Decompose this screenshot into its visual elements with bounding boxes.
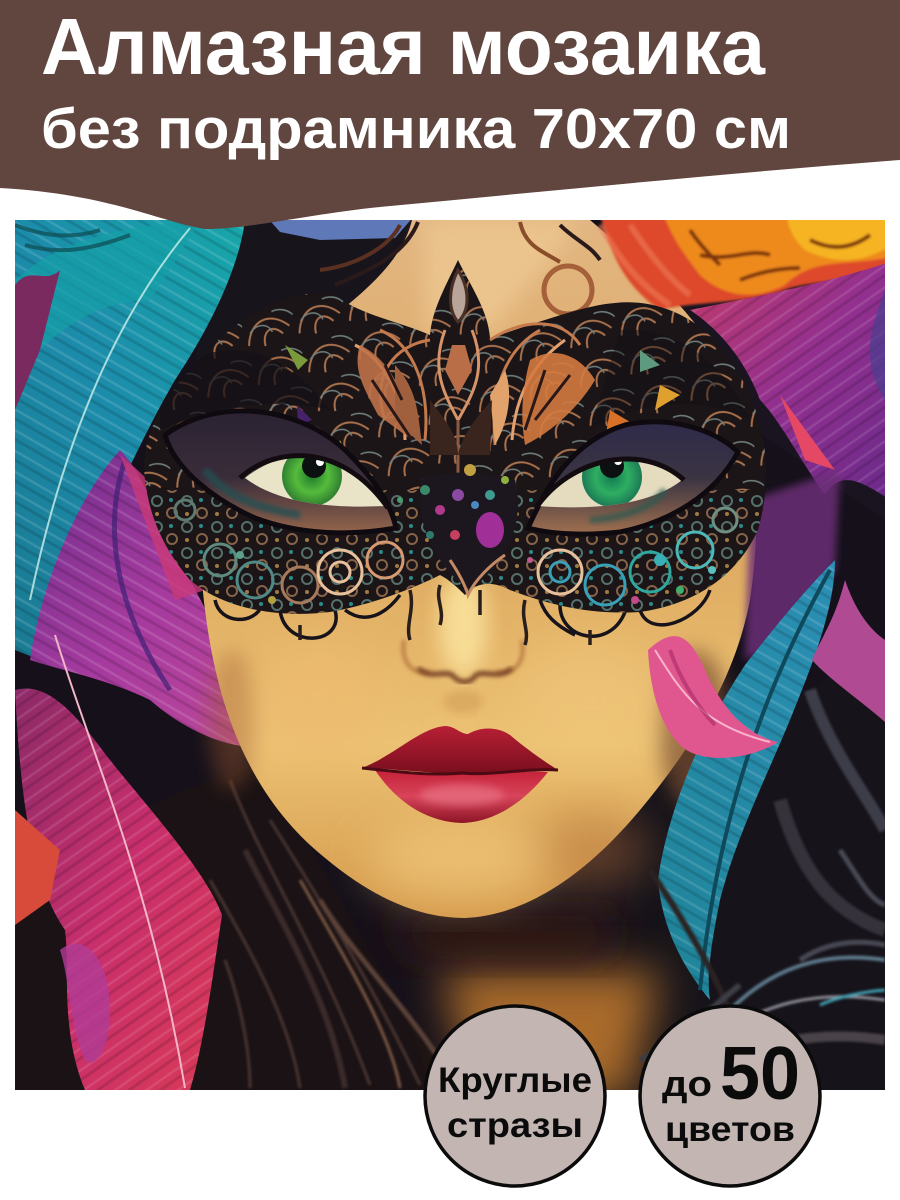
feather: lower-left pink <box>15 635 222 1090</box>
title <box>41 2 791 161</box>
badge: round rhinestones: Круглые <box>438 1061 592 1100</box>
copper fill patches <box>358 345 412 440</box>
badge: up to 50 colours: цветов <box>665 1110 795 1149</box>
badge: round rhinestones <box>425 1006 605 1186</box>
hanging lace loops <box>215 585 710 645</box>
feather: right purple <box>690 262 890 500</box>
left eye <box>205 446 388 515</box>
lips <box>362 726 558 823</box>
badge: up to 50 colours: 50 <box>720 1031 800 1115</box>
hair strands: lower left <box>210 780 440 1088</box>
hair strands: lower right <box>640 690 885 1085</box>
colour sparkles on lace <box>236 497 716 604</box>
left eye hole <box>165 411 396 533</box>
badge: up to 50 colours: до <box>662 1063 712 1104</box>
right eye hole <box>528 422 738 534</box>
badge: round rhinestones: стразы <box>447 1106 583 1145</box>
feather: blue at top <box>272 220 410 240</box>
feather: small pink at right edge <box>812 580 885 722</box>
bottom filigree scrolls <box>175 500 737 605</box>
right eye <box>536 447 684 520</box>
title: Алмазная мозаика <box>41 2 765 91</box>
badge: up to 50 colours <box>640 1006 820 1186</box>
nose <box>403 573 523 714</box>
feather: left magenta purple <box>30 450 240 746</box>
hair at forehead <box>320 222 600 314</box>
centre bridge gems <box>419 464 518 595</box>
flower: orange on top right <box>596 220 885 310</box>
painting: masked woman with feathers <box>15 205 900 1100</box>
face <box>200 220 756 918</box>
lace texture <box>140 260 780 630</box>
centre jewel drop <box>450 270 467 322</box>
feather: pink under the mask <box>648 636 778 758</box>
neck <box>380 915 660 1100</box>
mask <box>140 260 780 645</box>
dark hair background <box>15 220 885 1090</box>
copper filigree wings <box>355 324 580 480</box>
title: без подрамника 70х70 см <box>41 97 791 161</box>
mask base <box>144 260 766 614</box>
feather: top-left teal <box>15 220 245 660</box>
header banner <box>0 0 900 229</box>
wing gems <box>285 345 308 370</box>
feather: right teal <box>658 470 840 1000</box>
